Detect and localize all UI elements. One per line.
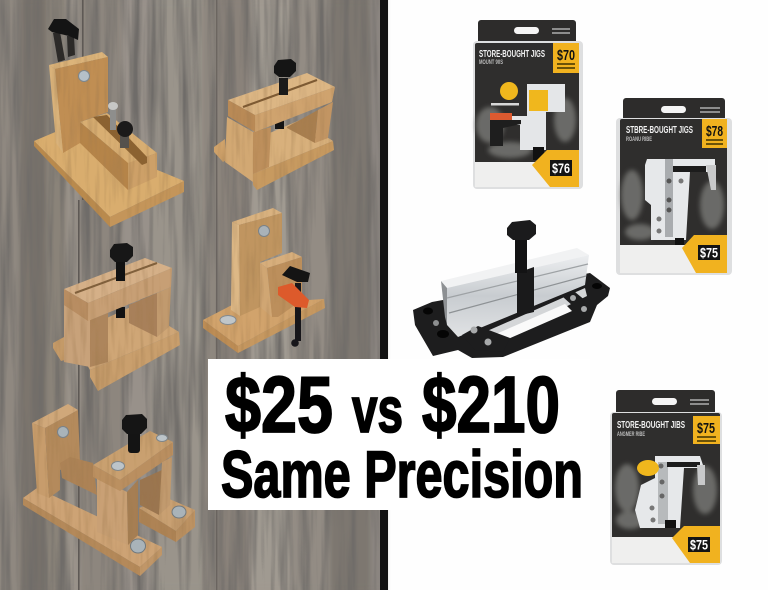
wooden jig: top left [34,19,184,227]
pack subtitle: ANGMER RIBE [617,432,645,438]
store-bought pack: bottom [610,390,722,565]
background: weathered wood planks [0,0,386,590]
pack title: STORE-BOUGHT JIGS [479,49,545,60]
yellow price badge [553,43,579,73]
yellow corner and bottom price [532,150,579,187]
yellow price badge [702,119,727,148]
yellow corner and bottom price: $75 [700,244,718,260]
jig photo on pack [490,82,565,160]
headline: same precision: Same Precision [221,437,583,511]
yellow price badge [693,416,720,444]
wooden jig: middle right with orange clamp [203,208,325,353]
yellow price badge: $70 [557,47,575,64]
white info panel [620,245,727,273]
yellow corner and bottom price [672,526,720,563]
headline: price comparison [225,360,560,449]
pack title: STORE-BOUGHT JIBS [617,420,685,431]
white info panel [475,162,579,187]
white info panel [612,537,720,563]
headline panel [208,359,590,511]
aluminum and black store-bought jig [413,220,610,358]
jig photo on pack [645,159,716,245]
headline: price comparison: vs [352,374,403,446]
wooden jig: bottom left [23,404,195,576]
store-bought pack: middle [616,98,732,275]
yellow corner and bottom price: $76 [552,160,570,176]
headline: price comparison: $25 [225,360,333,449]
store-bought pack: top [473,20,583,189]
pack title: STBRE-BOUGHT JIGS [626,125,693,136]
wooden jig: middle left [53,243,180,391]
center divider bar [380,0,388,590]
headline: price comparison: $210 [422,360,560,449]
pack subtitle: MOUNT 90S [479,60,503,66]
yellow price badge: $78 [706,123,723,140]
yellow price badge: $75 [697,420,715,437]
yellow corner and bottom price [682,235,727,273]
yellow corner and bottom price: $75 [690,536,708,552]
wooden jig: top right [214,59,335,190]
jig photo on pack [635,456,705,528]
pack subtitle: ROANU RIBE [626,137,652,143]
